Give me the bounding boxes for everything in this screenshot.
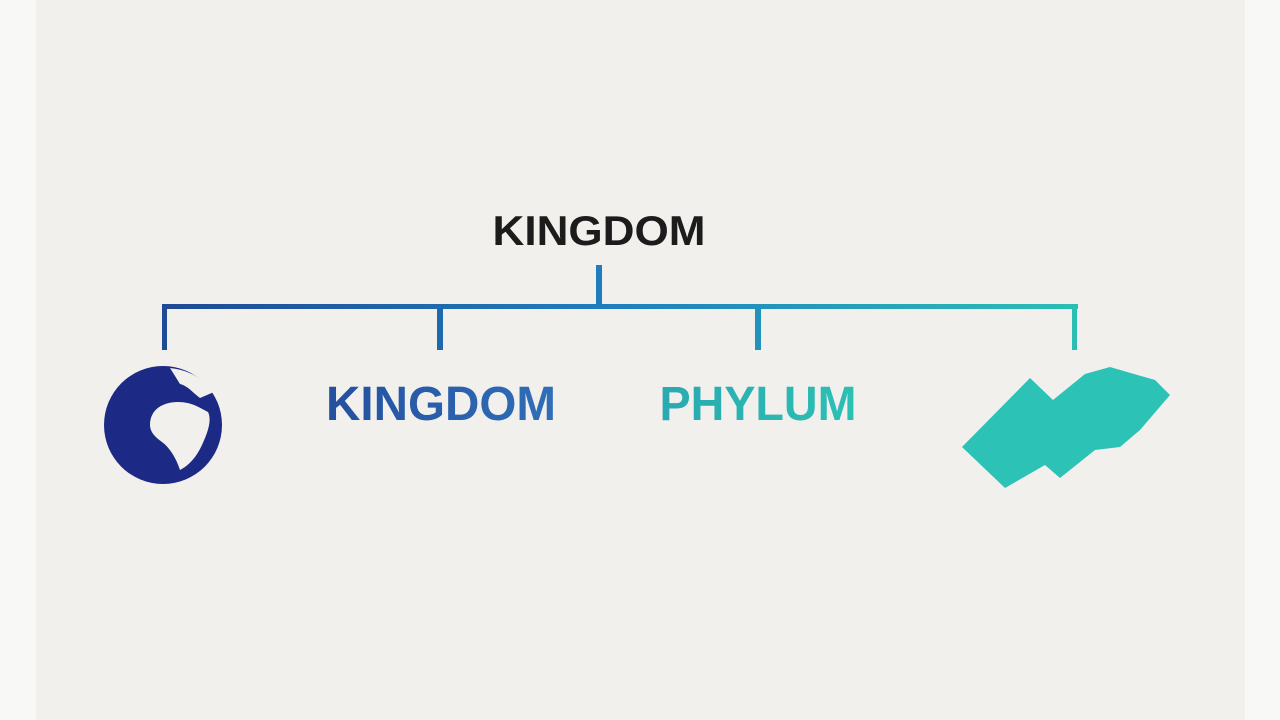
label: KINGDOM: KINGDOM: [326, 378, 556, 431]
icon: globe: [104, 366, 222, 484]
icon: teal shape: [962, 367, 1170, 488]
title: KINGDOM: [492, 207, 706, 254]
label: PHYLUM: PHYLUM: [660, 378, 856, 431]
tree connector: [162, 265, 1078, 350]
